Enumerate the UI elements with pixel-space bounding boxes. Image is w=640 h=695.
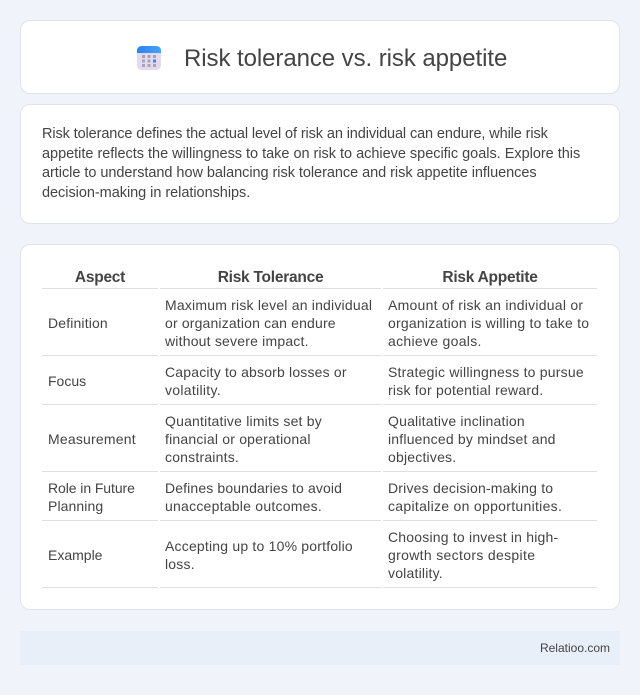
row: Measurement: objectives. — [388, 449, 456, 465]
row: Definition — [48, 297, 589, 349]
row: Example: Accepting up to 10% portfolio — [165, 538, 353, 554]
panel: comparison table — [20, 244, 620, 610]
row: Measurement: Measurement — [48, 431, 136, 447]
row: Example: growth sectors despite — [388, 547, 535, 563]
row: Definition: or organization can endure — [165, 315, 336, 331]
row: Definition: organization is willing to take to — [388, 315, 589, 331]
text: intro paragraph: article to understand how balancing risk tolerance and risk appetite influences — [42, 165, 537, 181]
row: Focus: Strategic willingness to pursue — [388, 364, 584, 380]
row: Measurement: financial or operational — [165, 431, 311, 447]
row: Definition: Amount of risk an individual or — [388, 297, 583, 313]
panel: title card — [20, 20, 620, 94]
title: Risk tolerance vs. risk appetite — [184, 45, 507, 72]
header: Aspect: Aspect — [75, 269, 125, 286]
row: Focus: Capacity to absorb losses or — [165, 364, 347, 380]
row: Role in Future Planning — [48, 480, 562, 514]
text: intro paragraph: decision-making in relationships. — [42, 184, 250, 200]
row: Focus: risk for potential reward. — [388, 382, 543, 398]
text: footer credit: Relatioo.com — [540, 641, 610, 655]
row: Role in Future Planning: Role in Future — [48, 480, 135, 496]
footer bar — [20, 631, 620, 665]
table header — [75, 269, 538, 286]
row: Role in Future Planning: capitalize on opportunities. — [388, 498, 562, 514]
row: Definition: Definition — [48, 315, 108, 331]
header: Risk Tolerance: Risk Tolerance — [218, 269, 323, 286]
icon: calendar — [137, 46, 161, 70]
row: Role in Future Planning: Defines boundaries to avoid — [165, 480, 342, 496]
text: intro paragraph: appetite reflects the willingness to take on risk to achieve specific goals. Explore this — [42, 146, 580, 162]
row: Measurement — [48, 413, 556, 465]
header: Risk Appetite: Risk Appetite — [442, 269, 538, 286]
row: Role in Future Planning: Planning — [48, 498, 103, 514]
row: Example: loss. — [165, 556, 195, 572]
row: Focus: Focus — [48, 373, 86, 389]
row: Definition: without severe impact. — [165, 333, 309, 349]
row: Measurement: Qualitative inclination — [388, 413, 525, 429]
row: Measurement: influenced by mindset and — [388, 431, 556, 447]
row: Measurement: constraints. — [165, 449, 239, 465]
row: Example: Choosing to invest in high- — [388, 529, 558, 545]
row: Focus: volatility. — [165, 382, 221, 398]
row: Definition: achieve goals. — [388, 333, 482, 349]
row: Example: Example — [48, 547, 102, 563]
row: Focus — [48, 364, 584, 398]
panel: introduction — [20, 104, 620, 224]
text: intro paragraph: Risk tolerance defines the actual level of risk an individual can endure, while risk — [42, 126, 548, 142]
row: Definition: Maximum risk level an individual — [165, 297, 372, 313]
row: Example: volatility. — [388, 565, 443, 581]
text: intro paragraph — [42, 126, 580, 200]
row: Role in Future Planning: unacceptable outcomes. — [165, 498, 322, 514]
row: Role in Future Planning: Drives decision-making to — [388, 480, 553, 496]
row: Measurement: Quantitative limits set by — [165, 413, 322, 429]
row: Example — [48, 529, 558, 581]
